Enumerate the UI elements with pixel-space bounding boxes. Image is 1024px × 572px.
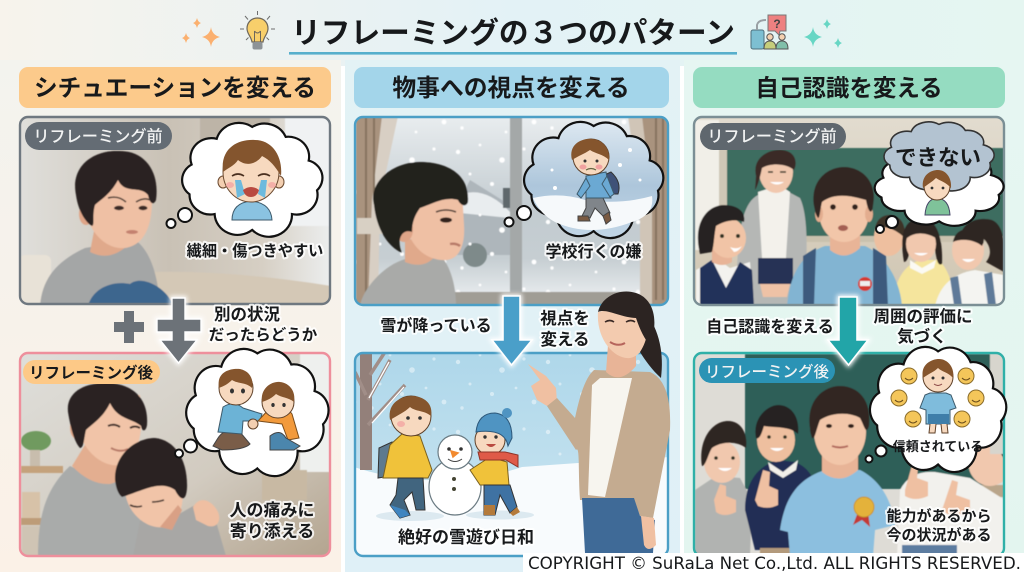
thought bubble: cannot do it — [875, 122, 1004, 233]
caption: empathy — [230, 500, 314, 541]
scene: classroom, anxious boy — [693, 116, 1005, 306]
caption: empathy: 寄り添える — [230, 522, 314, 541]
arrow caption: change self-awareness: 自己認識を変える — [706, 317, 834, 336]
caption: perfect snow play day: 絶好の雪遊び日和 — [398, 527, 534, 547]
panel: change the viewpoint — [354, 67, 670, 556]
scene: classroom, confident boy — [693, 352, 1012, 556]
scene: boy looking at snow through window — [354, 116, 669, 306]
heading: situation — [19, 67, 331, 108]
arrow caption: what if: 別の状況 — [214, 305, 280, 324]
label pill: before — [25, 122, 172, 150]
arrow caption: change viewpoint — [540, 309, 590, 349]
label pill: after: リフレーミング後 — [29, 363, 153, 382]
icon: question and people: ? — [773, 17, 781, 31]
arrow: teal down — [828, 297, 868, 365]
scene: snow play illustration — [354, 352, 669, 556]
label pill: after — [23, 360, 160, 384]
arrow caption: change viewpoint: 視点を — [540, 309, 590, 328]
thought bubble: trusted — [866, 347, 1006, 472]
icon: question and people — [751, 15, 788, 49]
panel: change the situation — [19, 67, 331, 556]
scene: after reframing, comforting friend — [19, 352, 331, 556]
scene: before reframing, sad boy — [19, 116, 331, 306]
icon: teal sparkles — [804, 19, 842, 48]
label pill: after — [699, 358, 835, 383]
icon: light bulb — [240, 11, 275, 50]
label pill: before — [700, 123, 846, 150]
caption: empathy: 人の痛みに — [230, 500, 314, 520]
arrow caption: notice others' evaluation: 気づく — [897, 327, 947, 346]
caption: capable — [886, 507, 992, 544]
arrow: down with plus bar — [157, 298, 201, 363]
icon: orange sparkles — [182, 18, 220, 47]
thought bubble: helping friend — [175, 349, 329, 476]
heading: situation: シチュエーションを変える — [34, 75, 316, 102]
thought bubble: trusted: 信頼されている — [893, 439, 983, 454]
icon: plus sign — [114, 311, 144, 343]
arrow caption: notice others' evaluation: 周囲の評価に — [874, 307, 972, 326]
caption: capable: 今の状況がある — [886, 526, 992, 544]
arrow caption: what if — [209, 305, 318, 344]
thought bubble: reluctant walk to school — [504, 122, 663, 238]
label pill: before: リフレーミング前 — [33, 128, 163, 146]
caption: hate going to school: 学校行くの嫌 — [545, 242, 642, 261]
heading: self-awareness: 自己認識を変える — [755, 75, 943, 101]
heading: viewpoint — [354, 67, 669, 108]
heading: viewpoint: 物事への視点を変える — [392, 75, 630, 102]
thought bubble: crying child — [166, 123, 322, 237]
arrow caption: snowing: 雪が降っている — [380, 316, 492, 335]
arrow caption: notice others' evaluation — [874, 307, 972, 346]
heading: self-awareness — [693, 67, 1005, 108]
label pill: after: リフレーミング後 — [705, 363, 829, 381]
title: リフレーミングの３つのパターン — [291, 17, 735, 50]
label pill: before: リフレーミング前 — [707, 128, 837, 146]
arrow caption: what if: だったらどうか — [209, 326, 318, 344]
caption: sensitive: 繊細・傷つきやすい — [187, 242, 323, 260]
panel: change self-awareness — [693, 67, 1012, 556]
caption: capable: 能力があるから — [886, 507, 992, 525]
thought bubble: cannot do it: できない — [895, 146, 981, 170]
arrow caption: change viewpoint: 変える — [540, 330, 590, 349]
arrow: blue down — [492, 296, 532, 365]
figure: woman pointing — [528, 292, 670, 553]
